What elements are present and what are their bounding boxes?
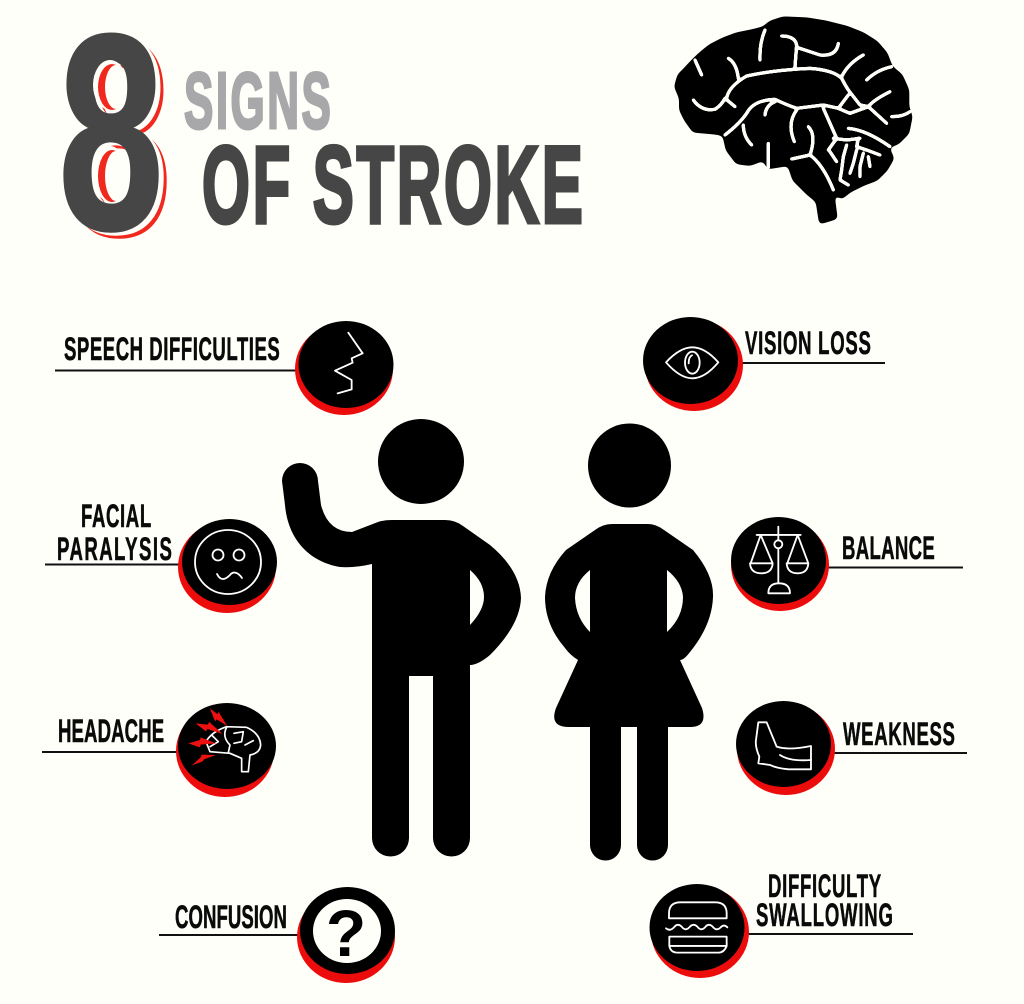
- sign: speech difficulties: [55, 321, 394, 415]
- sign: vision loss: [643, 317, 885, 411]
- label: facial paralysis: FACIAL: [81, 498, 151, 534]
- label: difficulty swallowing: DIFFICULTY: [768, 868, 881, 904]
- icon: brain: [675, 17, 912, 223]
- icon: sad face: [195, 530, 261, 594]
- label: facial paralysis: [57, 498, 172, 567]
- icon: brain with lightning: [188, 708, 261, 772]
- label: confusion: CONFUSION: [175, 899, 287, 935]
- label: difficulty swallowing: [756, 868, 893, 933]
- label: weakness: WEAKNESS: [843, 716, 955, 752]
- title words: of stroke: OF STROKE: [202, 123, 583, 246]
- label: balance: BALANCE: [842, 530, 935, 566]
- figure: woman: [545, 424, 713, 860]
- sign: headache: [42, 703, 276, 797]
- icon: face profile: [335, 333, 363, 393]
- label: vision loss: VISION LOSS: [745, 325, 871, 361]
- sign: confusion: [159, 887, 395, 983]
- label: difficulty swallowing: SWALLOWING: [756, 897, 893, 933]
- figure: man: [282, 419, 521, 856]
- sign: balance: [731, 517, 963, 611]
- title: [58, 0, 583, 295]
- icon: weak arm: [756, 722, 811, 769]
- icon: question mark: ?: [326, 896, 366, 970]
- label: facial paralysis: PARALYSIS: [57, 531, 172, 567]
- icon: scales: [750, 527, 808, 593]
- sign: weakness: [736, 701, 967, 795]
- sign: difficulty swallowing: [650, 868, 913, 978]
- sign: facial paralysis: [45, 498, 277, 613]
- label: headache: HEADACHE: [58, 713, 164, 749]
- title word: signs: SIGNS: [184, 56, 331, 145]
- icon: question mark: [313, 896, 381, 970]
- icon: eye: [666, 347, 718, 378]
- icon: burger: [666, 902, 727, 953]
- label: speech difficulties: SPEECH DIFFICULTIES: [64, 331, 280, 367]
